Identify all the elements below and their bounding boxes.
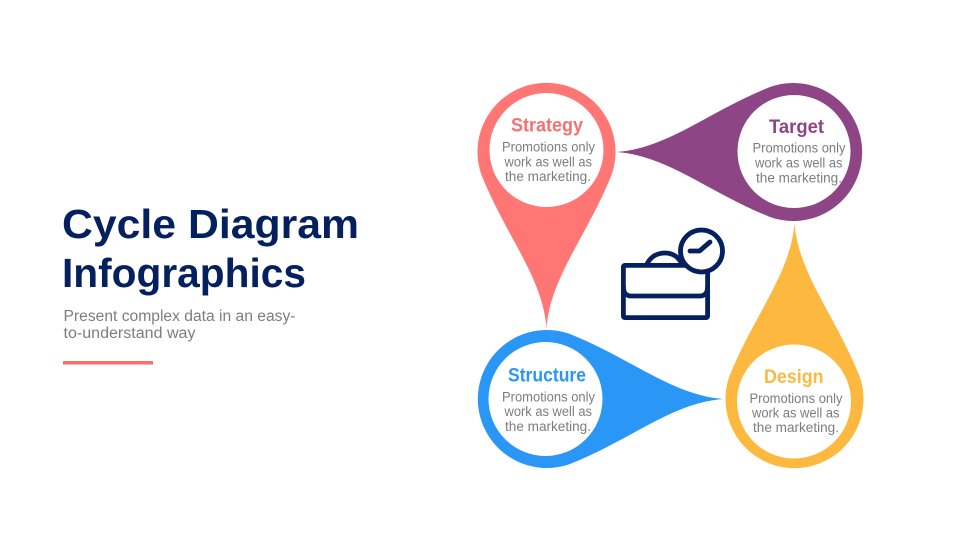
pin: structure: the marketing. (505, 419, 591, 434)
title: Infographics (62, 250, 306, 296)
title (62, 201, 359, 296)
icon: briefcase with clock (623, 230, 722, 318)
subtitle: to-understand way (64, 325, 196, 342)
pin: strategy: Promotions only (502, 140, 595, 154)
subtitle (64, 308, 296, 342)
pin: design: work as well as (751, 406, 840, 420)
pin: structure: Promotions only (502, 390, 595, 404)
pin: design: the marketing. (753, 420, 839, 435)
pin: structure (478, 330, 723, 468)
title: Cycle Diagram (62, 201, 359, 247)
pin: target (617, 83, 862, 221)
pin: strategy: Strategy (511, 116, 583, 136)
accent underline (63, 361, 153, 364)
pin: structure: Structure (508, 366, 586, 386)
pin: strategy: work as well as (504, 154, 592, 170)
pin: target: Target (769, 117, 825, 138)
pin: target: Promotions only (752, 140, 846, 156)
pin: target: work as well as (754, 156, 843, 170)
pin: structure: work as well as (504, 404, 592, 419)
pin: strategy: the marketing. (505, 169, 591, 184)
pin: target: the marketing. (756, 170, 842, 186)
pin: design (726, 223, 864, 468)
pin: strategy (478, 83, 616, 328)
pin: design: Design (764, 367, 824, 388)
subtitle: Present complex data in an easy- (64, 308, 296, 325)
pin: design: Promotions only (750, 391, 843, 406)
